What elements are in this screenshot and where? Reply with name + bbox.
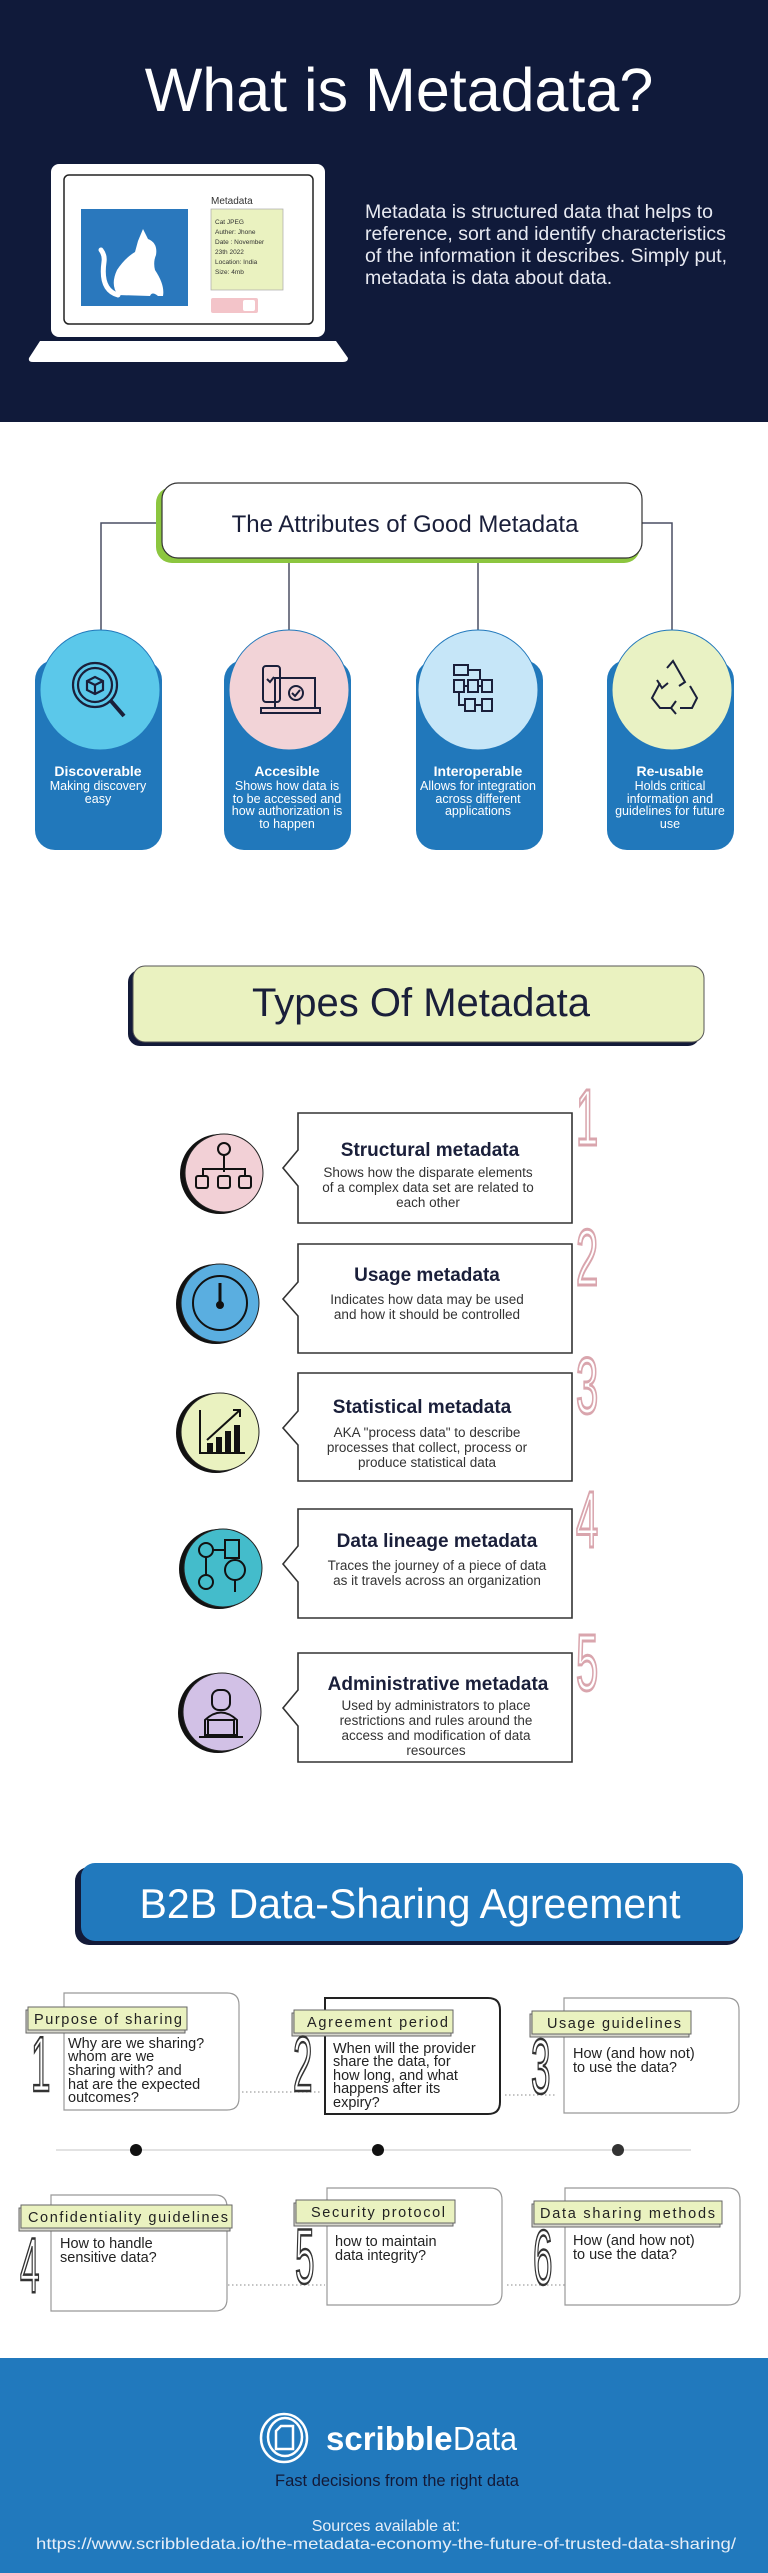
panel: interoperable: Interoperable xyxy=(434,763,523,779)
card: usage guidelines xyxy=(530,1998,739,2113)
card: agreement period: expiry? xyxy=(333,2095,380,2111)
card: security protocol: Security protocol xyxy=(311,2205,445,2221)
card: purpose of sharing: 1 xyxy=(31,2020,51,2108)
item: structural: each other xyxy=(396,1195,460,1210)
card: agreement period: 2 xyxy=(293,2020,313,2108)
item: data lineage: 4 xyxy=(576,1476,598,1565)
card: purpose of sharing: hat are the expected xyxy=(68,2077,200,2093)
card: purpose of sharing: outcomes? xyxy=(68,2090,139,2106)
item: data lineage xyxy=(179,1476,598,1618)
laptop illustration xyxy=(29,164,348,362)
panel: reusable: Re-usable xyxy=(637,763,704,779)
card: purpose of sharing: whom are we xyxy=(67,2049,154,2065)
timeline xyxy=(56,2144,691,2156)
panel: accessible xyxy=(224,630,351,850)
card: security protocol xyxy=(294,2188,502,2305)
tagline: Fast decisions from the right data xyxy=(275,2472,520,2490)
sources: https://www.scribbledata.io/the-metadata-economy-the-future-of-trusted-data-sharing/ xyxy=(36,2536,737,2553)
item: statistical: AKA "process data" to describe xyxy=(334,1425,520,1440)
item: usage: 2 xyxy=(576,1214,598,1303)
sources xyxy=(36,2518,737,2553)
icon: hierarchy xyxy=(196,1143,251,1188)
panel: reusable: guidelines for future xyxy=(615,804,725,818)
description text: Metadata is structured data that helps to xyxy=(365,201,713,223)
item: structural xyxy=(180,1074,598,1223)
item: statistical: Statistical metadata xyxy=(333,1397,512,1418)
card: purpose of sharing: Why are we sharing? xyxy=(68,2036,204,2052)
metadata label card: Auther: Jhone xyxy=(215,229,256,236)
panel: reusable xyxy=(607,630,734,850)
card: data sharing methods: Data sharing methods xyxy=(540,2206,715,2222)
card: usage guidelines: 3 xyxy=(531,2022,551,2110)
panel: accessible: to happen xyxy=(259,817,315,831)
card: security protocol: data integrity? xyxy=(335,2248,426,2264)
card: data sharing methods: 6 xyxy=(533,2213,553,2301)
item: data lineage: Data lineage metadata xyxy=(337,1531,538,1552)
item: statistical: 3 xyxy=(576,1342,598,1431)
footer background xyxy=(0,2358,768,2573)
heading: attributes: The Attributes of Good Metadata xyxy=(232,511,579,538)
header background xyxy=(0,0,768,422)
metadata label card: Metadata xyxy=(211,196,253,207)
item: structural: Shows how the disparate elements xyxy=(323,1165,533,1180)
connectors xyxy=(101,523,672,630)
panel: reusable: information and xyxy=(627,792,713,806)
item: statistical: produce statistical data xyxy=(358,1455,497,1470)
panel: discoverable xyxy=(35,630,162,850)
card: confidentiality guidelines: How to handle xyxy=(60,2236,153,2252)
item: usage xyxy=(176,1214,598,1353)
card: agreement period: share the data, for xyxy=(333,2054,451,2070)
panel: discoverable: easy xyxy=(85,792,112,806)
panel: accessible: Accesible xyxy=(254,763,320,779)
icon: recycle xyxy=(652,661,697,714)
item: administrative: Used by administrators to place xyxy=(341,1698,531,1713)
metadata label card: Size: 4mb xyxy=(215,269,244,276)
icon: dial xyxy=(193,1276,247,1330)
card: security protocol: 5 xyxy=(295,2212,315,2300)
card: security protocol: how to maintain xyxy=(335,2234,437,2250)
card: confidentiality guidelines: sensitive data? xyxy=(60,2250,157,2266)
item: administrative: 5 xyxy=(576,1619,598,1708)
card: purpose of sharing: sharing with? and xyxy=(68,2063,182,2079)
panel: accessible: how authorization is xyxy=(232,804,342,818)
card: usage guidelines: Usage guidelines xyxy=(547,2016,681,2032)
dotted connectors xyxy=(228,2092,565,2285)
metadata label card: Cat JPEG xyxy=(215,219,244,226)
card: agreement period: how long, and what xyxy=(333,2068,458,2084)
description text: reference, sort and identify characteristics xyxy=(365,223,726,245)
description text xyxy=(365,201,727,289)
item: administrative: Administrative metadata xyxy=(328,1674,549,1695)
logo: scribble data xyxy=(261,2414,518,2462)
item: administrative: access and modification of data xyxy=(341,1728,531,1743)
item: usage: Indicates how data may be used xyxy=(330,1292,524,1307)
panel: reusable: use xyxy=(660,817,680,831)
panel: interoperable: Allows for integration xyxy=(420,779,536,793)
item: administrative: resources xyxy=(406,1743,466,1758)
logo: scribble data: scribble xyxy=(326,2420,453,2457)
panel: accessible: Shows how data is xyxy=(235,779,339,793)
item: usage: and how it should be controlled xyxy=(334,1307,520,1322)
card: usage guidelines: How (and how not) xyxy=(573,2046,695,2062)
item: structural: 1 xyxy=(576,1074,598,1163)
card: purpose of sharing: Purpose of sharing xyxy=(34,2012,182,2028)
card: agreement period: happens after its xyxy=(333,2081,440,2097)
item: administrative xyxy=(178,1619,598,1762)
card: data sharing methods: How (and how not) xyxy=(573,2233,695,2249)
heading: B2B agreement xyxy=(75,1863,743,1945)
heading: types of metadata xyxy=(128,966,704,1046)
icon: chart xyxy=(200,1410,245,1453)
panel: discoverable: Discoverable xyxy=(54,763,142,779)
card: data sharing methods: to use the data? xyxy=(573,2247,677,2263)
metadata label card: Date : November xyxy=(215,239,265,246)
logo: scribble data: Data xyxy=(453,2420,518,2457)
item: statistical xyxy=(176,1342,598,1481)
item: administrative: restrictions and rules around the xyxy=(340,1713,532,1728)
sources: Sources available at: xyxy=(312,2518,460,2535)
card: purpose of sharing xyxy=(26,1993,239,2110)
heading: attributes xyxy=(156,483,642,563)
card: usage guidelines: to use the data? xyxy=(573,2060,677,2076)
icon: person at laptop xyxy=(199,1690,243,1737)
heading: types of metadata: Types Of Metadata xyxy=(252,981,591,1025)
card: agreement period xyxy=(292,1998,500,2114)
item: structural: Structural metadata xyxy=(341,1140,520,1161)
panel: interoperable xyxy=(416,630,543,850)
item: data lineage: Traces the journey of a piece of data xyxy=(328,1558,547,1573)
card: confidentiality guidelines xyxy=(19,2195,232,2311)
icon: flowchart xyxy=(454,665,492,711)
heading: B2B agreement: B2B Data-Sharing Agreement xyxy=(140,1880,681,1927)
panel: reusable: Holds critical xyxy=(635,779,705,793)
card: agreement period: When will the provider xyxy=(333,2041,476,2057)
panel: discoverable: Making discovery xyxy=(50,779,147,793)
description text: of the information it describes. Simply put, xyxy=(365,245,727,267)
icon: magnifier xyxy=(73,663,124,716)
panel: accessible: to be accessed and xyxy=(233,792,341,806)
card: agreement period: Agreement period xyxy=(307,2015,448,2031)
panel: interoperable: across different xyxy=(435,792,521,806)
description text: metadata is data about data. xyxy=(365,267,612,289)
icon: lineage xyxy=(199,1540,245,1592)
item: structural: of a complex data set are related to xyxy=(322,1180,534,1195)
card: confidentiality guidelines: Confidentiality guidelines xyxy=(28,2210,228,2226)
card: data sharing methods xyxy=(532,2188,740,2305)
icon: devices check xyxy=(261,666,320,713)
metadata label card xyxy=(211,196,283,313)
metadata label card: 23th 2022 xyxy=(215,249,244,256)
icon: cat photo xyxy=(81,209,188,306)
card: confidentiality guidelines: 4 xyxy=(20,2221,40,2309)
item: data lineage: as it travels across an organization xyxy=(333,1573,541,1588)
title: What is Metadata? xyxy=(145,56,653,124)
panel: interoperable: applications xyxy=(445,804,511,818)
item: usage: Usage metadata xyxy=(354,1265,500,1286)
item: statistical: processes that collect, process or xyxy=(327,1440,528,1455)
metadata label card: Location: India xyxy=(215,259,258,266)
